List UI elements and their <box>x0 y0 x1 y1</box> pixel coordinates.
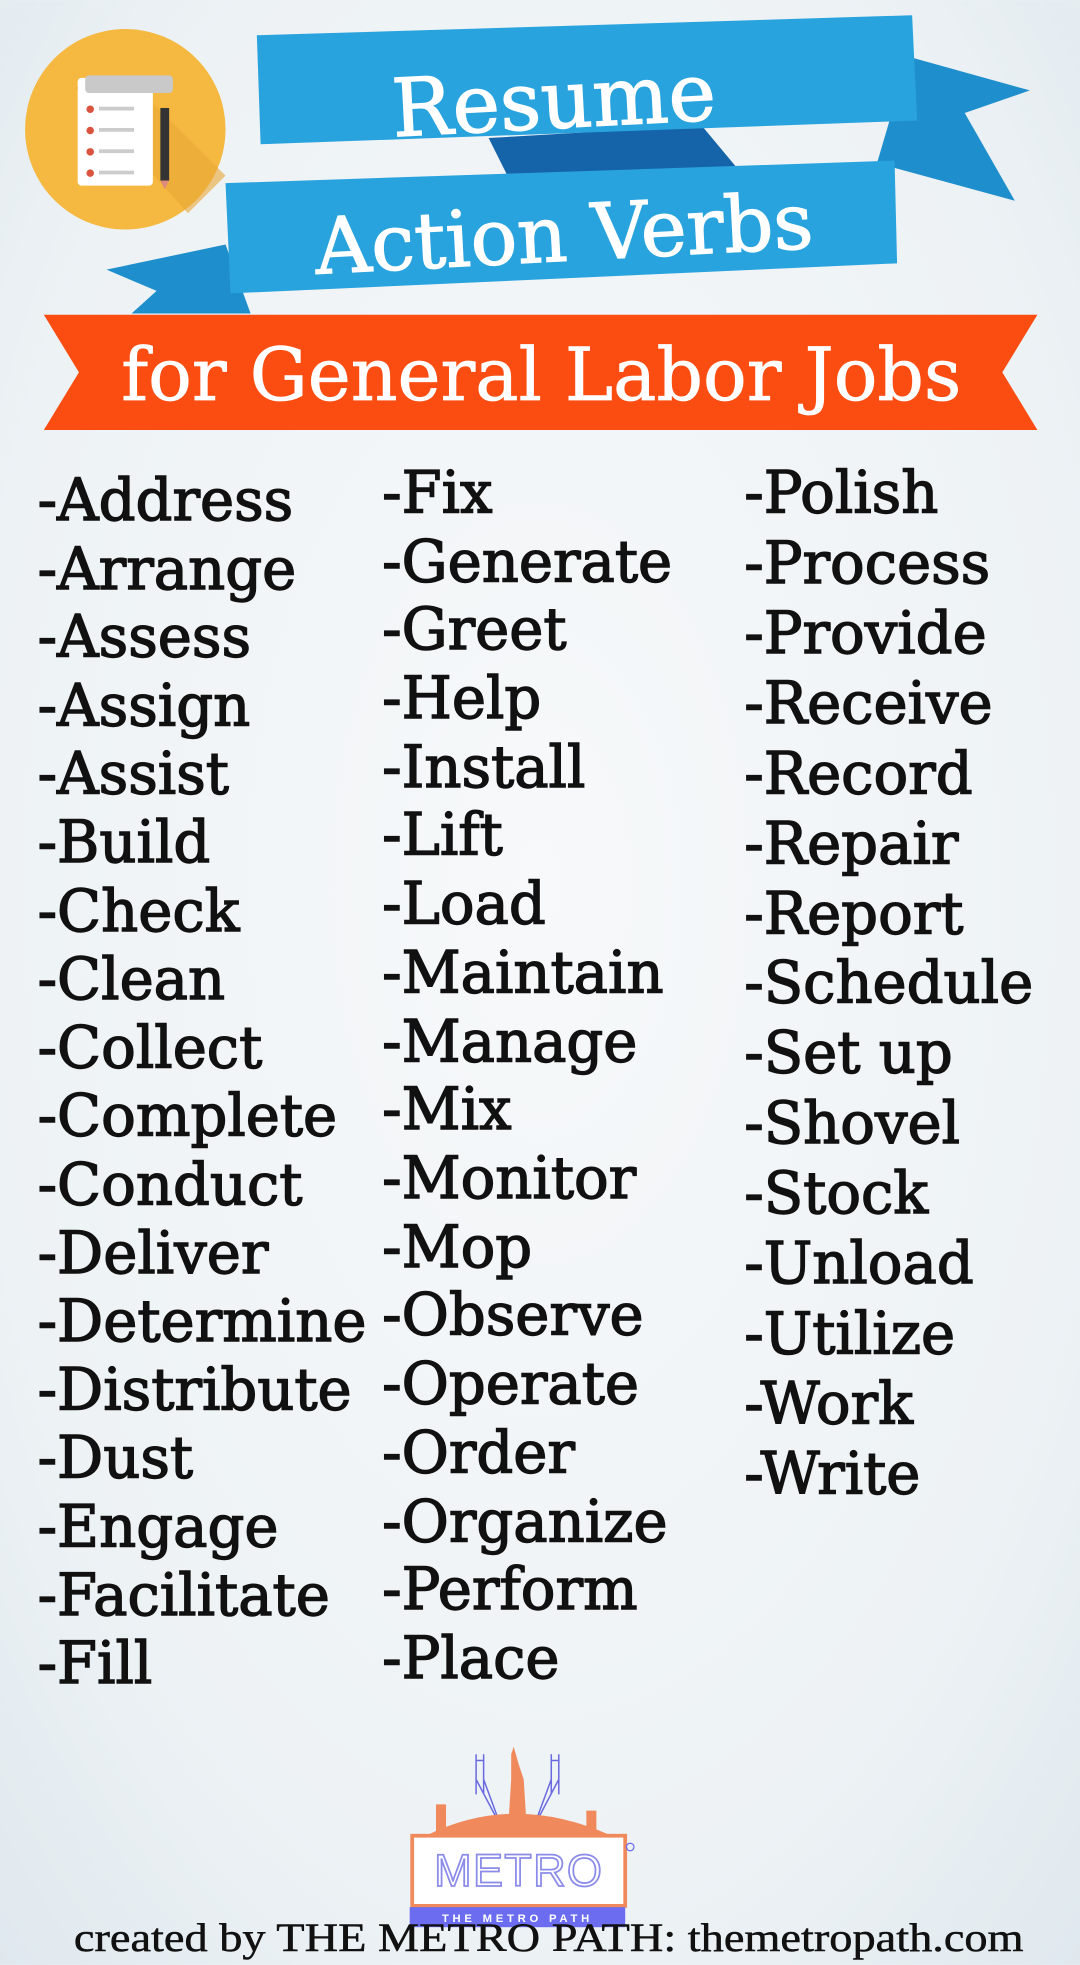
word column 1 <box>38 467 366 1697</box>
word column 3: -Receive <box>744 670 993 737</box>
word column 2: -Place <box>382 1625 560 1692</box>
word column 1: -Conduct <box>38 1151 302 1218</box>
title text: Action Verbs <box>312 177 815 293</box>
title text <box>312 46 815 293</box>
word column 3: -Report <box>744 881 963 948</box>
word column 1: -Assess <box>38 604 251 671</box>
word column 3: -Repair <box>744 810 959 877</box>
word column 3: -Unload <box>744 1230 974 1297</box>
word column 1: -Fill <box>38 1630 152 1697</box>
word column 1: -Dust <box>38 1424 193 1491</box>
word column 1: -Check <box>38 878 241 945</box>
word column 1: -Assist <box>38 740 229 807</box>
word column 2: -Maintain <box>382 940 664 1007</box>
word column 2: -Fix <box>382 460 493 527</box>
word column 3: -Work <box>744 1371 914 1438</box>
word column 1: -Collect <box>38 1015 262 1082</box>
word column 2: -Monitor <box>382 1145 637 1212</box>
logo: The Metro Path: METRO <box>434 1845 603 1896</box>
word column 2: -Install <box>382 734 585 801</box>
word column 2: -Greet <box>382 596 567 663</box>
word column 3: -Record <box>744 740 973 807</box>
word column 3: -Process <box>744 530 990 597</box>
word column 2: -Mop <box>382 1214 532 1281</box>
logo: The Metro Path <box>410 1747 634 1927</box>
word column 2: -Load <box>382 871 546 938</box>
word column 1: -Arrange <box>38 536 296 603</box>
logo: The Metro Path: THE METRO PATH <box>442 1913 593 1925</box>
word column 3: -Utilize <box>744 1300 955 1367</box>
word column 2: -Operate <box>382 1350 639 1417</box>
word column 1: -Distribute <box>38 1357 352 1424</box>
word column 1: -Clean <box>38 946 225 1013</box>
word column 2: -Order <box>382 1419 575 1486</box>
word column 3: -Shovel <box>744 1090 960 1157</box>
word column 2: -Help <box>382 665 541 732</box>
title text: Resume <box>390 46 718 155</box>
word column 1: -Deliver <box>38 1220 269 1287</box>
word column 2: -Manage <box>382 1008 637 1075</box>
subtitle banner: for General Labor Jobs <box>121 334 961 418</box>
word column 2 <box>382 460 672 1692</box>
title ribbon: Resume Action Verbs <box>106 15 1030 313</box>
word column 2: -Generate <box>382 529 672 596</box>
word column 3: -Stock <box>744 1160 929 1227</box>
word column 2: -Lift <box>382 802 503 869</box>
word column 3 <box>744 460 1033 1508</box>
word column 2: -Perform <box>382 1556 638 1623</box>
word column 1: -Engage <box>38 1493 278 1560</box>
word column 2: -Organize <box>382 1488 668 1555</box>
word column 1: -Determine <box>38 1288 366 1355</box>
word column 1: -Facilitate <box>38 1562 330 1629</box>
icon: resume checklist in orange circle <box>25 29 226 230</box>
word column 2: -Observe <box>382 1282 644 1349</box>
word column 1: -Assign <box>38 673 250 740</box>
word column 3: -Polish <box>744 460 938 527</box>
word column 3: -Write <box>744 1441 920 1508</box>
word column 1: -Build <box>38 809 210 876</box>
subtitle banner <box>44 315 1037 430</box>
word column 1: -Complete <box>38 1082 337 1149</box>
word column 3: -Provide <box>744 600 987 667</box>
word column 3: -Set up <box>744 1020 953 1087</box>
footer credit: created by THE METRO PATH: themetropath.com <box>74 1915 1024 1960</box>
word column 1: -Address <box>38 467 293 534</box>
word column 3: -Schedule <box>744 950 1033 1017</box>
word column 2: -Mix <box>382 1076 512 1143</box>
